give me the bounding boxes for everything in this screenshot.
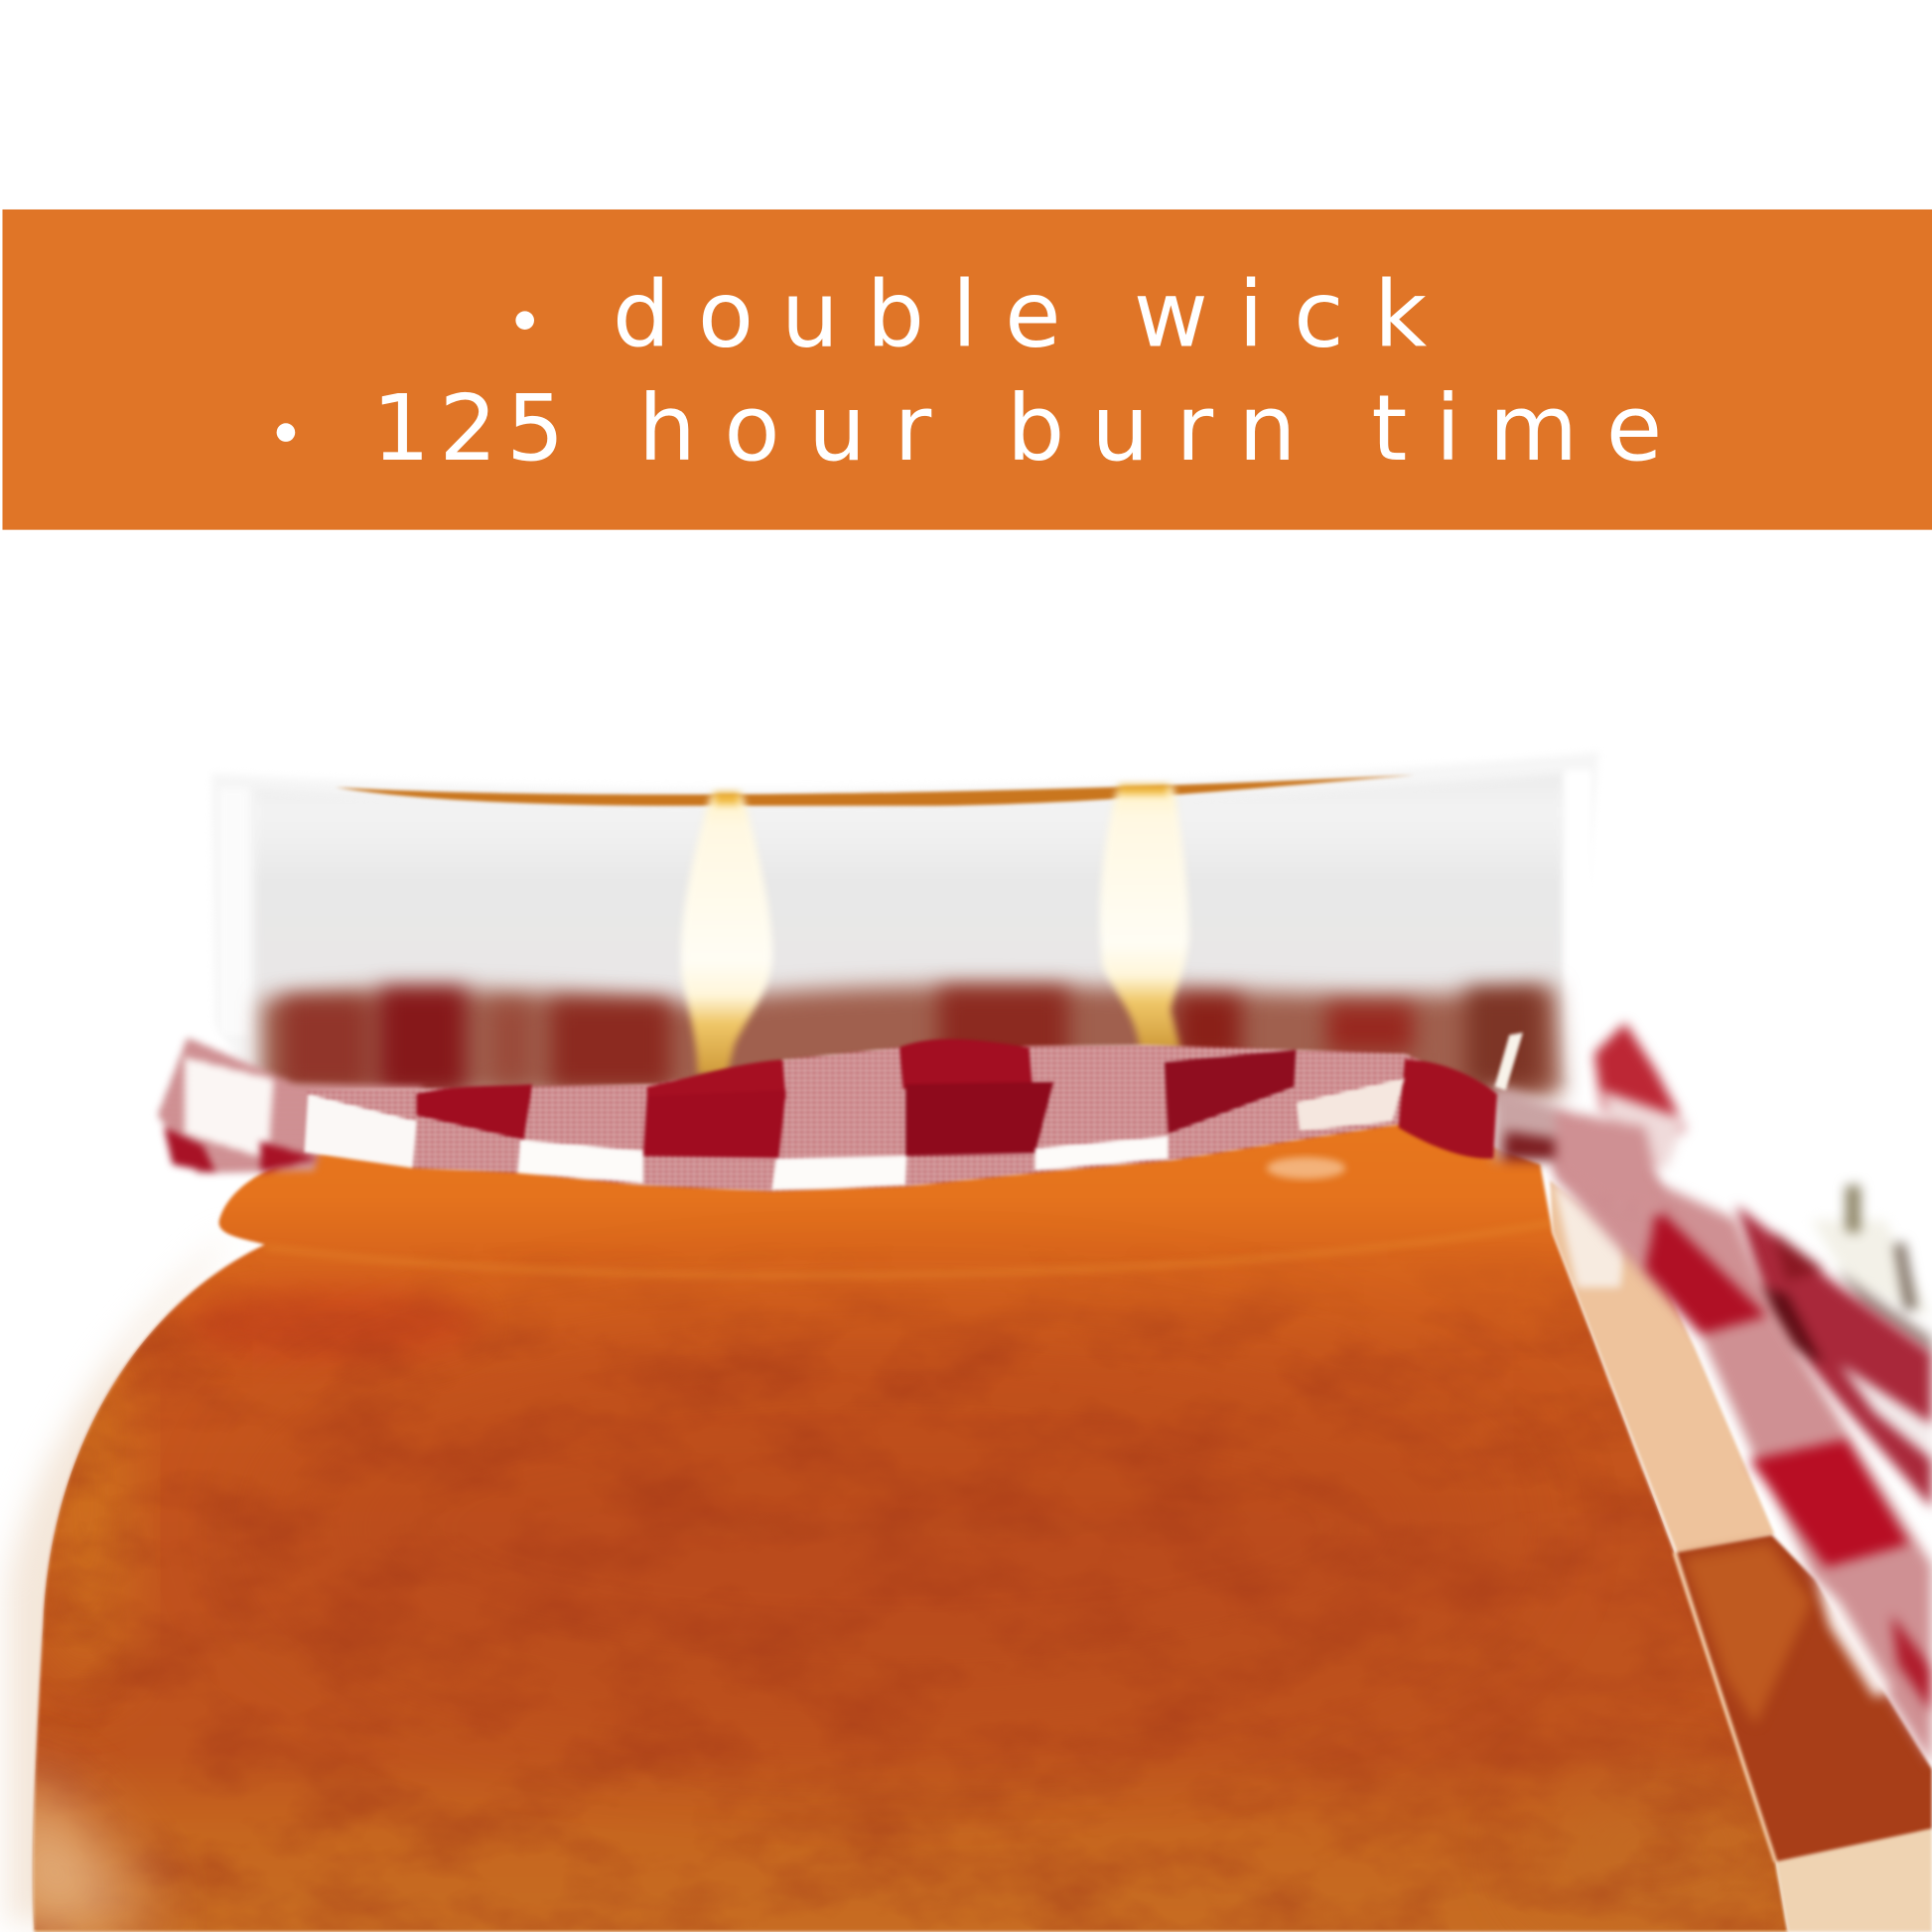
line 2: 125 hour burn time: burn (1007, 375, 1297, 482)
wax far rim line (336, 775, 1415, 806)
ribbon tail: back strand (1736, 1205, 1932, 1508)
twig sprig (1811, 1185, 1932, 1355)
gingham ribbon band (305, 1039, 1497, 1191)
ribbon base (305, 1044, 1497, 1191)
bullet: double wick (515, 311, 534, 330)
line 2: 125 hour burn time: time (1371, 375, 1662, 482)
orange banner (2, 209, 1932, 530)
ribbon end: left (158, 1037, 423, 1173)
check squares: lower row (305, 1078, 1405, 1190)
candle wax body (0, 1109, 1932, 1932)
flame: right (1100, 785, 1189, 1049)
banner text (277, 262, 1662, 482)
jar side label strip (1550, 1180, 1932, 1932)
glass jar neck (211, 752, 1599, 1084)
line 1: double wick: double (613, 262, 1061, 368)
flame: left (681, 792, 772, 1074)
line 1: double wick: wick (1134, 262, 1427, 368)
ribbon frayed thread (1494, 1033, 1523, 1090)
reflected ribbon in glass (261, 986, 1563, 1097)
check squares: top ruffle (647, 1039, 1033, 1099)
check squares: upper row (416, 1049, 1497, 1159)
bullet: burn time (277, 423, 295, 442)
ribbon tail: front strand (1555, 1115, 1932, 1765)
ribbon knot (1493, 1023, 1686, 1213)
line 2: 125 hour burn time: hour (638, 375, 931, 482)
line 2: 125 hour burn time: 125 (372, 375, 564, 482)
